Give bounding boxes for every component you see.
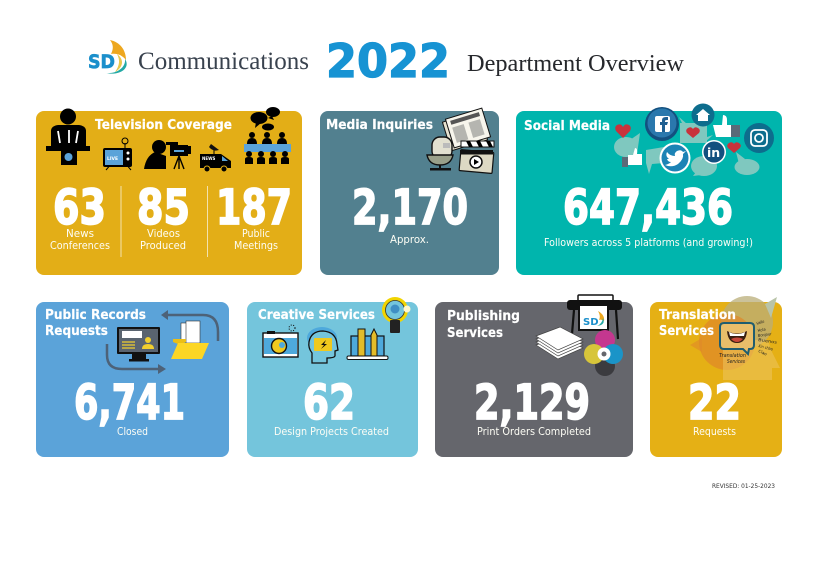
heading: Publishing <box>447 308 520 324</box>
icon: thumbs up <box>713 115 740 137</box>
heading: Public Records <box>45 307 146 323</box>
icon: chat bubble with smile <box>720 323 754 354</box>
heading <box>45 307 146 339</box>
statistic label: Print Orders Completed <box>477 426 591 438</box>
icon caption: Translation <box>719 353 746 359</box>
stat: videos produced: Produced <box>140 240 186 252</box>
heading: Translation <box>659 307 736 323</box>
icon caption: Services <box>727 359 745 365</box>
icon: laptop with tools <box>347 329 388 360</box>
heading <box>447 308 520 341</box>
revision date: REVISED: 01-25-2023 <box>712 483 775 490</box>
icon: news van: NEWS <box>202 156 215 161</box>
logo: SD sun <box>88 40 127 74</box>
heading: Creative Services <box>258 307 375 323</box>
icon: languages list: Ciao <box>758 348 768 357</box>
statistic label: Requests <box>693 426 736 438</box>
heading: Services <box>447 325 503 341</box>
panel: media inquiries <box>320 108 499 275</box>
header <box>88 34 685 88</box>
panel: publishing services <box>435 295 633 457</box>
stat: news conferences: 63 <box>53 180 106 236</box>
heading: Social Media <box>524 118 610 134</box>
logo: SD sun: SD <box>88 51 115 73</box>
heading <box>659 307 736 339</box>
icon: camera <box>263 325 298 357</box>
icon: monitor <box>117 327 160 362</box>
statistic label: Approx. <box>390 234 429 246</box>
department name: Communications <box>138 48 309 75</box>
icon: live television <box>103 138 132 170</box>
stat: videos produced: Videos <box>147 228 180 240</box>
panel: social media <box>516 104 782 275</box>
stat: videos produced: 85 <box>137 180 190 236</box>
stat: news conferences: News <box>66 228 94 240</box>
statistic: 62 <box>303 375 355 431</box>
icon: hearts <box>615 124 741 153</box>
icon: folder <box>171 321 209 359</box>
icon: translation heads <box>690 296 780 380</box>
statistic label: Design Projects Created <box>274 426 389 438</box>
icon: live television: LIVE <box>107 156 118 162</box>
statistic: 647,436 <box>563 180 733 236</box>
statistic label: Followers across 5 platforms (and growing!) <box>544 237 753 249</box>
icon: twitter <box>660 142 690 174</box>
statistic: 2,129 <box>474 375 590 431</box>
stat: public meetings: Meetings <box>234 240 278 252</box>
icon: linkedin: in <box>707 145 720 160</box>
heading: Media Inquiries <box>326 117 433 133</box>
icon: languages list: Buenos <box>758 337 777 345</box>
icon: languages list: Xin chào <box>758 343 774 352</box>
stat: public meetings: Public <box>242 228 270 240</box>
stat: news conferences: Conferences <box>50 240 110 252</box>
icon: head with idea <box>307 327 338 363</box>
icon: languages list: Hello <box>756 319 765 326</box>
icon: light bulb <box>382 297 410 333</box>
icon: linkedin <box>702 140 726 164</box>
icon: large format printer <box>567 295 622 339</box>
arrow: bottom <box>107 344 166 374</box>
year: 2022 <box>326 34 450 88</box>
icon: facebook <box>645 107 679 141</box>
icon: speaker at podium <box>46 108 90 165</box>
statistic: 6,741 <box>74 375 185 431</box>
panel: television coverage <box>36 107 302 275</box>
statistic: 22 <box>688 375 741 431</box>
panel: translation services <box>650 296 782 457</box>
icon: cmyk circles <box>584 330 623 376</box>
icon: languages list: Bonjour <box>757 331 772 338</box>
icon: paper stack <box>536 327 583 359</box>
stat: news conferences <box>50 180 110 252</box>
icon: video clapperboard <box>459 141 494 173</box>
icon caption <box>719 353 746 365</box>
statistic: 2,170 <box>352 180 468 236</box>
icon: languages list <box>756 319 777 357</box>
arrow: top <box>161 310 218 341</box>
icons: speech bubbles <box>614 117 760 176</box>
heading: Services <box>659 323 714 339</box>
icon: thumbs up small <box>622 148 642 167</box>
heading: Requests <box>45 323 108 339</box>
icon: news van <box>200 144 231 172</box>
panel: public records requests <box>36 302 229 457</box>
stat: videos produced <box>137 180 190 252</box>
stat: public meetings: 187 <box>216 180 292 236</box>
icon: newspaper <box>442 108 491 151</box>
icon: languages list: Hola <box>757 326 766 333</box>
subtitle: Department Overview <box>467 51 685 77</box>
statistic label: Closed <box>117 426 148 438</box>
icon: large format printer: SD <box>583 317 599 328</box>
icon: instagram <box>744 123 774 153</box>
icon: home <box>692 104 714 126</box>
icon: microphone <box>427 137 453 170</box>
icon: public meeting <box>244 107 291 164</box>
stat: public meetings <box>216 180 292 252</box>
icon: videographer with camera <box>144 140 191 169</box>
heading: Television Coverage <box>95 117 232 133</box>
panel: creative services <box>247 297 418 457</box>
